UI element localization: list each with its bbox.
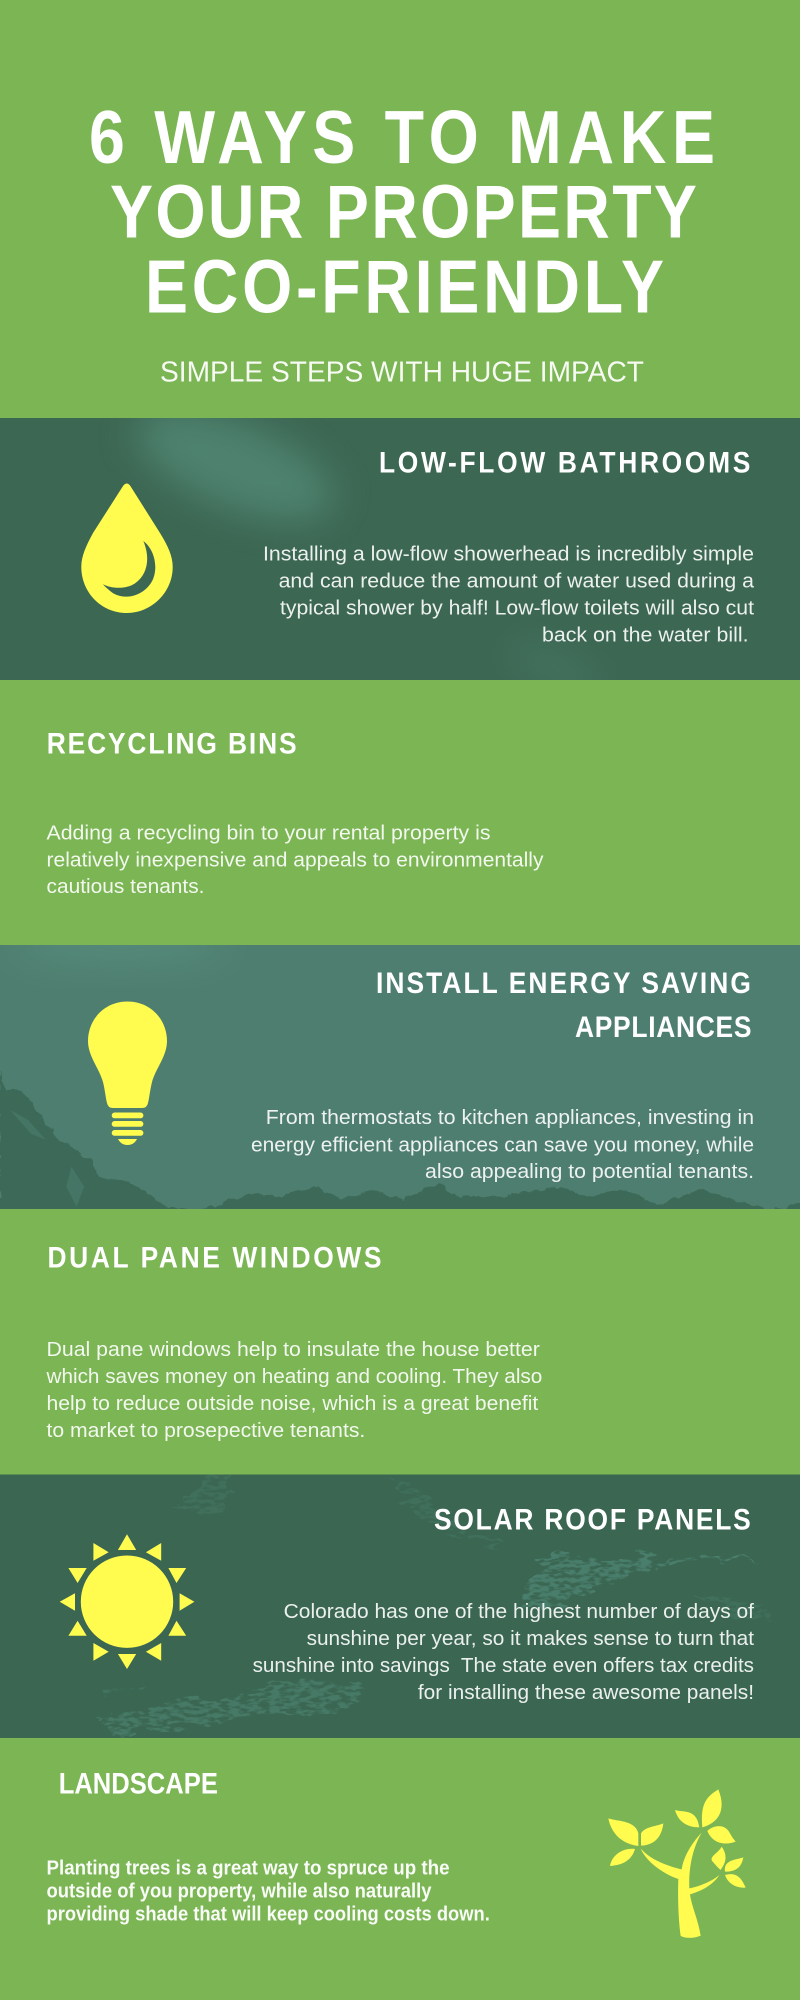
icon: tree [608,1789,746,1938]
text: dual pane windows body: help to reduce outside noise, which is a great benefit [46,1393,539,1415]
panel: solar roof panels [0,1474,800,1738]
text: energy appliances body: energy efficient appliances can save you money, while [251,1134,754,1156]
panel: recycling bins [0,680,800,945]
text: energy appliances body: From thermostats to kitchen appliances, investing in [266,1107,754,1129]
icon: light bulb [88,1002,167,1145]
text: solar roof panels body: sunshine per year, so it makes sense to turn that [307,1628,754,1650]
heading: landscape: LANDSCAPE [59,1767,218,1800]
text: energy appliances body: also appealing to potential tenants. [425,1161,754,1183]
heading: install energy saving appliances: APPLIANCES [575,1009,751,1043]
text: dual pane windows body: Dual pane windows help to insulate the house better [46,1339,540,1361]
panel: install energy saving appliances [0,925,800,1217]
subtitle: SIMPLE STEPS WITH HUGE IMPACT [160,357,644,389]
text: recycling bins body: cautious tenants. [46,876,205,898]
text: landscape body: providing shade that will keep cooling costs down. [46,1904,490,1926]
text: low-flow bathrooms body: typical shower by half! Low-flow toilets will also cut [280,598,754,620]
text: recycling bins body [46,822,544,898]
text: recycling bins body: Adding a recycling bin to your rental property is [46,822,491,844]
text: dual pane windows body: to market to prosepective tenants. [46,1420,365,1442]
heading: install energy saving appliances [376,966,751,1043]
text: dual pane windows body: which saves money on heating and cooling. They also [45,1366,542,1388]
text: solar roof panels body: Colorado has one of the highest number of days of [284,1601,754,1623]
text: energy appliances body [251,1107,754,1183]
text: landscape body: outside of you property, while also naturally [46,1880,432,1902]
title [89,95,715,329]
panel: dual pane windows [0,1209,800,1474]
title: ECO-FRIENDLY [145,245,664,329]
text: recycling bins body: relatively inexpensive and appeals to environmentally [46,849,544,871]
icon: water drop [81,484,173,613]
heading: install energy saving appliances: INSTALL ENERGY SAVING [376,966,751,1000]
title: YOUR PROPERTY [110,170,697,254]
text: dual pane windows body [45,1339,542,1442]
text: landscape body [46,1858,490,1926]
title: 6 WAYS TO MAKE [89,95,715,179]
heading: low-flow bathrooms: LOW-FLOW BATHROOMS [379,445,750,479]
text: low-flow bathrooms body: back on the water bill. [542,624,748,646]
text: solar roof panels body: for installing these awesome panels! [418,1682,754,1704]
heading: solar roof panels: SOLAR ROOF PANELS [434,1502,751,1536]
panel: header [0,0,800,418]
text: solar roof panels body [253,1601,754,1704]
text: landscape body: Planting trees is a great way to spruce up the [46,1858,450,1880]
panel: low-flow bathrooms [0,418,800,680]
heading: dual pane windows: DUAL PANE WINDOWS [48,1240,381,1274]
text: low-flow bathrooms body: Installing a low-flow showerhead is incredibly simple [263,544,754,566]
text: solar roof panels body: sunshine into savings The state even offers tax credits [253,1655,754,1677]
text: low-flow bathrooms body [263,544,755,646]
heading: recycling bins: RECYCLING BINS [47,726,297,760]
text: low-flow bathrooms body: and can reduce the amount of water used during a [279,570,755,592]
icon: sun [60,1534,194,1669]
panel: landscape [0,1738,800,2000]
